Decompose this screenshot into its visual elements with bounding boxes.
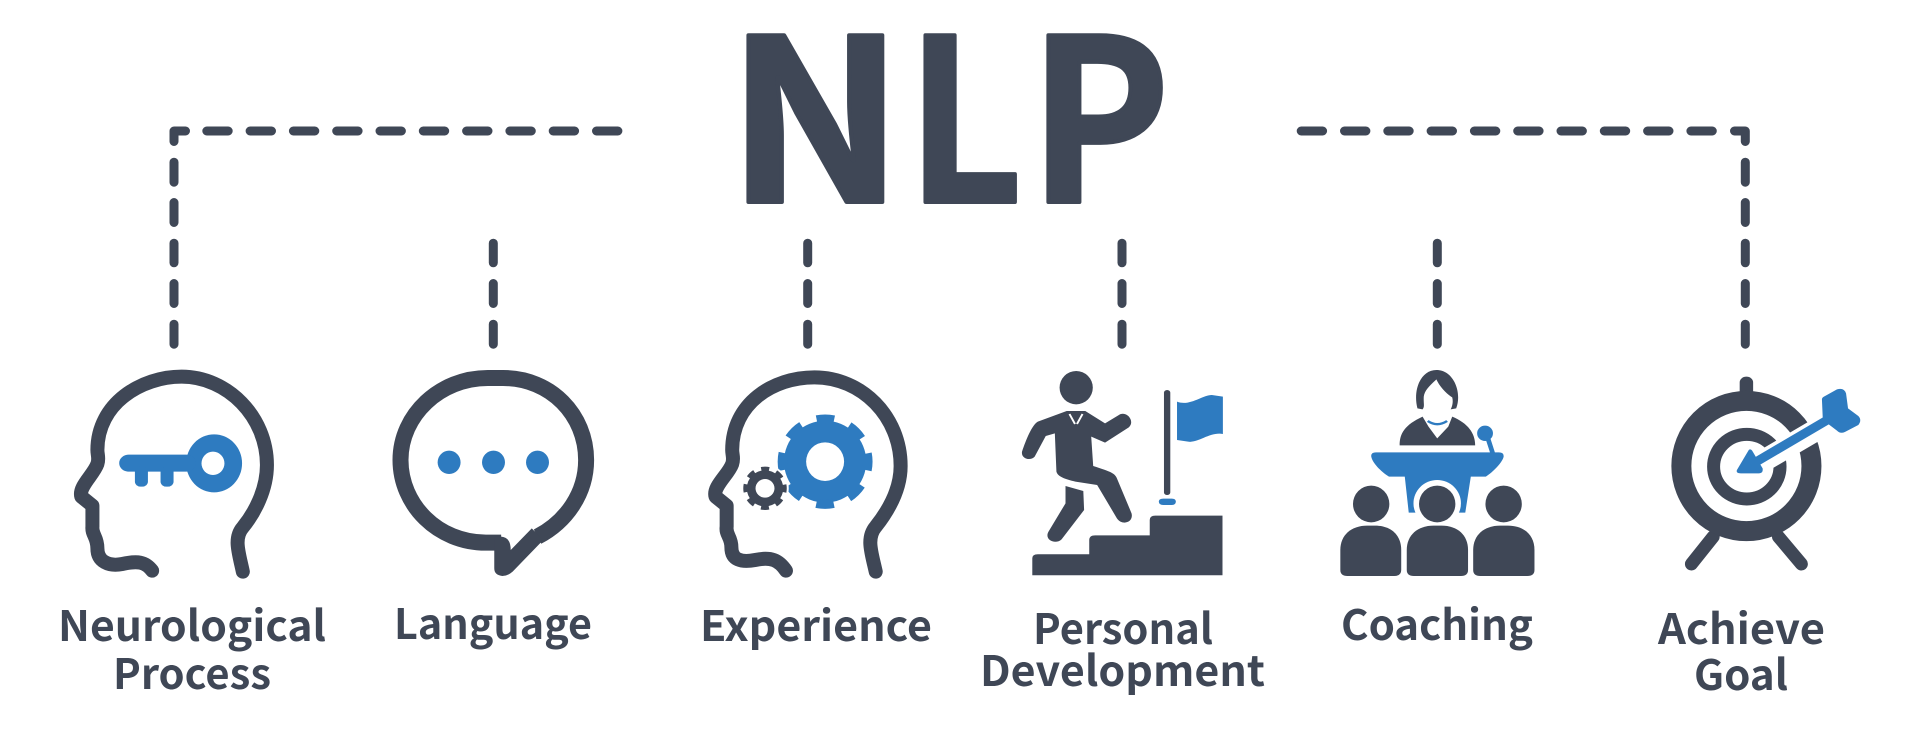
connector: Language <box>489 243 498 344</box>
icon: head with gears <box>715 377 901 572</box>
icon: head with key <box>81 377 267 572</box>
connector: right dashed bracket <box>1301 131 1745 344</box>
label: Achieve Goal <box>1657 596 1825 703</box>
label: Achieve Goal: Achieve <box>1657 596 1825 657</box>
label: Language: Language <box>394 591 592 652</box>
connector: Experience <box>803 243 812 344</box>
title: NLP <box>727 0 1170 267</box>
label: Personal Development <box>980 596 1265 699</box>
label: Neurological Process: Process <box>113 641 271 702</box>
icon: person climbing stairs to flag <box>1022 371 1223 575</box>
label: Neurological Process: Neurological <box>58 593 326 654</box>
label: Experience: Experience <box>700 593 932 654</box>
connector: Coaching <box>1433 243 1442 344</box>
icon: speaker at podium with audience <box>1340 370 1534 576</box>
connector: Personal Development <box>1118 243 1126 344</box>
label: Neurological Process <box>58 593 326 702</box>
label: Personal Development: Development <box>980 638 1265 699</box>
label: Achieve Goal: Goal <box>1694 642 1788 703</box>
connector: left dashed bracket <box>174 131 618 344</box>
icon: speech bubble <box>401 378 586 576</box>
label: Coaching: Coaching <box>1341 592 1533 653</box>
label: Personal Development: Personal <box>1033 596 1213 657</box>
icon: target with arrow <box>1681 377 1861 564</box>
